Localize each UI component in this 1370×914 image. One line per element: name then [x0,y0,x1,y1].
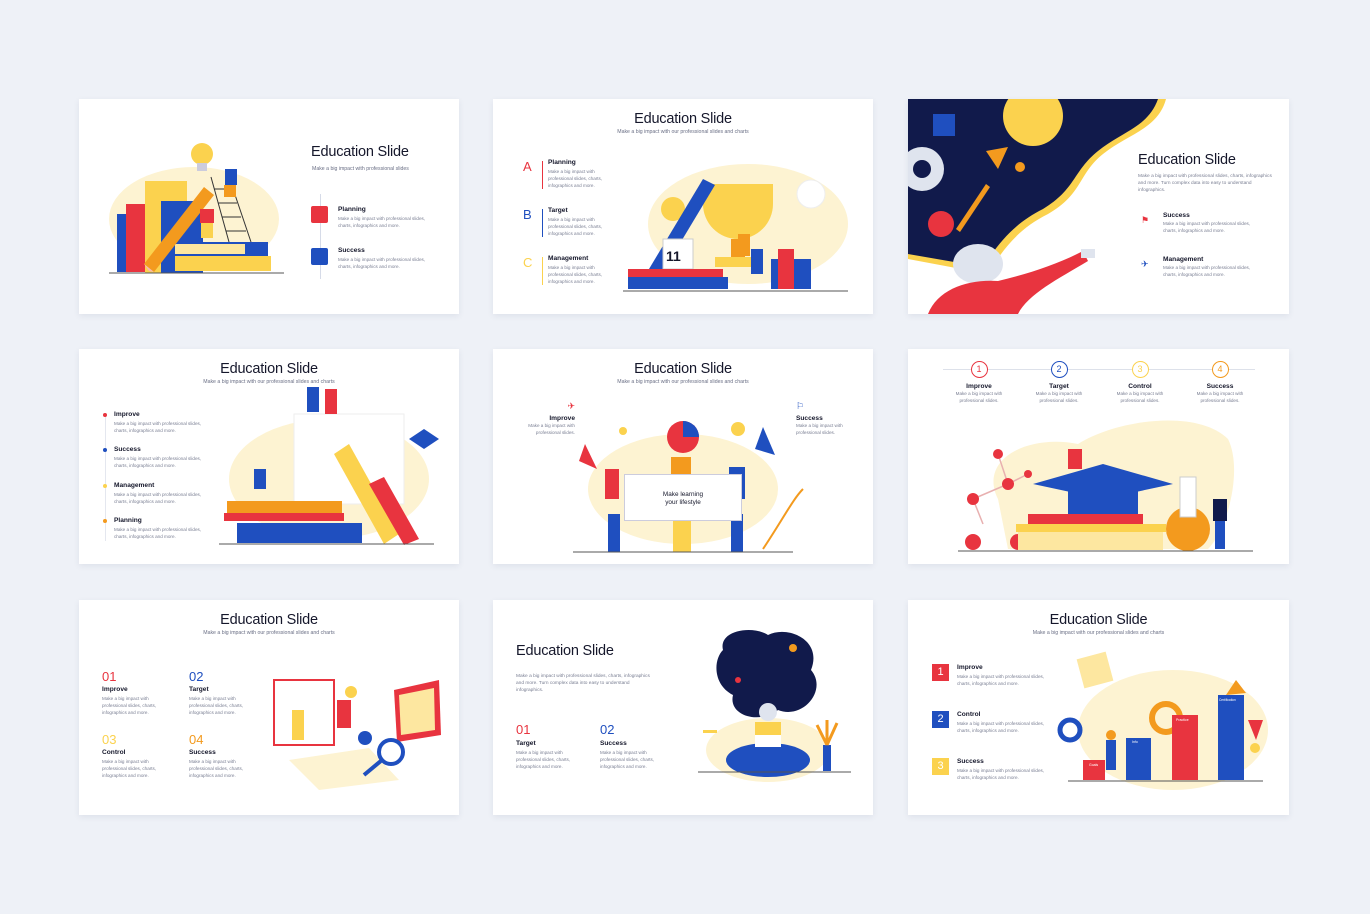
item 03 [102,732,156,778]
title: Education Slide [634,361,732,377]
item: success: Make a big impact with professional slides, charts, infographics and more. [1163,221,1250,233]
step 1: 1 [976,364,982,374]
item 01: Target [516,740,536,747]
item B: Make a big impact with professional slides, charts, infographics and more. [548,217,602,236]
item: success: Success [338,247,365,254]
slide 4 [79,349,459,564]
step 4 [1197,361,1243,403]
slide 7 [79,600,459,815]
paragraph: Make a big impact with professional slides, charts, infographics and more. Turn complex data into easy to understand infographics. [1138,174,1272,193]
item 03: 03 [102,732,116,747]
slide 8 [493,600,873,815]
item: management: Make a big impact with professional slides, charts, infographics and more. [114,492,201,504]
step 2: Make a big impact with professional slides. [1036,391,1082,403]
title: Education Slide [220,361,318,377]
item 1 [932,664,1044,686]
item 02 [189,669,243,715]
item: success: Success [796,415,823,422]
item: success [103,446,201,468]
item 01 [102,669,156,715]
item: planning: Planning [338,206,366,213]
item 01 [516,722,570,769]
item: planning: Make a big impact with professional slides, charts, infographics and more. [114,527,201,539]
item A: A [523,159,532,174]
item B: Target [548,207,568,214]
item: management [1141,256,1250,277]
sign [624,474,742,521]
item 3 [932,758,1044,780]
item C: C [523,255,532,270]
sign: Make learning [663,491,703,498]
item B: B [523,207,532,222]
illustration: bar chart with gears: Certification [1219,698,1236,702]
item 2: 2 [937,713,944,725]
item A: Planning [548,159,576,166]
item: management: Make a big impact with professional slides, charts, infographics and more. [1163,265,1250,277]
item: improve: Make a big impact with professional slides. [528,423,575,435]
item 3: Success [957,758,984,765]
item 02: Make a big impact with professional slides, charts, infographics and more. [189,696,243,715]
item 04: Make a big impact with professional slides, charts, infographics and more. [189,759,243,778]
item: improve: Make a big impact with professional slides, charts, infographics and more. [114,421,201,433]
subtitle: Make a big impact with our professional slides and charts [203,630,335,636]
item 02: Success [600,740,627,747]
item C: Make a big impact with professional slides, charts, infographics and more. [548,265,602,284]
item 3: 3 [937,760,944,772]
illustration: meditating reader with space cloud [698,630,851,782]
item 01: Improve [102,686,128,693]
item 1: Improve [957,664,983,671]
step 1: Make a big impact with professional slides. [956,391,1002,403]
item 01: 01 [516,722,530,737]
step 2: Target [1049,383,1069,390]
item: improve [103,411,201,433]
item: planning: Planning [114,517,142,524]
item: success [796,401,843,435]
item 01: Make a big impact with professional slides, charts, infographics and more. [102,696,156,715]
item: planning [311,206,425,228]
step 3: Control [1128,383,1152,390]
item 02: Target [189,686,209,693]
item 1: Make a big impact with professional slides, charts, infographics and more. [957,674,1044,686]
illustration: bar chart with gears [1058,652,1268,790]
item: management [103,482,201,504]
illustration: bar chart with gears: Goals [1089,763,1098,767]
item 03: Control [102,749,125,756]
item: success: Success [114,446,141,453]
illustration: trophy, ruler, books: 11 [666,248,681,264]
item C [523,255,602,285]
item: improve: ✈ [567,401,575,411]
subtitle: Make a big impact with our professional slides and charts [617,379,749,385]
title: Education Slide [311,144,409,160]
illustration: graduation cap, molecules, flask [958,420,1253,552]
subtitle: Make a big impact with our professional slides and charts [203,379,335,385]
slide 6 [908,349,1289,564]
item: success: Make a big impact with professional slides. [796,423,843,435]
item: success: ⚐ [796,401,804,411]
illustration: bar chart with gears: Info [1132,740,1138,744]
step 3: Make a big impact with professional slides. [1117,391,1163,403]
illustration: people holding sign [573,421,804,552]
item 2 [932,711,1044,733]
paragraph: Make a big impact with professional slides, charts, infographics and more. Turn complex data into easy to understand infographics. [516,674,650,693]
item: success [311,247,425,269]
item: success: Make a big impact with professional slides, charts, infographics and more. [338,257,425,269]
item 04: 04 [189,732,203,747]
sign: your lifestyle [665,499,701,506]
item 04 [189,732,243,778]
item 2: Make a big impact with professional slides, charts, infographics and more. [957,721,1044,733]
item C: Management [548,255,588,262]
step 3: 3 [1137,364,1142,374]
item: success: Success [1163,212,1190,219]
step 4: 4 [1217,364,1222,374]
illustration: trophy, ruler, books [623,164,848,292]
item 2: Control [957,711,980,718]
slide 9 [908,600,1289,815]
illustration: dreaming girl with space hair [908,99,1166,314]
slide 3 [908,99,1289,314]
step 2: 2 [1056,364,1062,374]
item A: Make a big impact with professional slides, charts, infographics and more. [548,169,602,188]
subtitle: Make a big impact with our professional slides and charts [1033,630,1164,636]
item: planning: Make a big impact with professional slides, charts, infographics and more. [338,216,425,228]
item: improve: Improve [114,411,140,418]
step 2 [1036,361,1082,403]
step 1: Improve [966,383,992,390]
step 4: Success [1207,383,1233,390]
item 02: 02 [189,669,203,684]
item 01: Make a big impact with professional slides, charts, infographics and more. [516,750,570,769]
subtitle: Make a big impact with professional slides [312,166,409,172]
item 1: 1 [937,666,944,678]
illustration: bar chart with gears: Practice [1176,718,1189,722]
item 01: 01 [102,669,116,684]
item: success: ⚑ [1141,215,1149,225]
title: Education Slide [220,612,318,628]
slide 2 [493,99,873,314]
item: management: Management [1163,256,1203,263]
item: improve [528,401,575,435]
item: management: Management [114,482,154,489]
subtitle: Make a big impact with our professional slides and charts [617,129,749,135]
title: Education Slide [1138,152,1236,168]
title: Education Slide [1050,612,1147,628]
item: success: Make a big impact with professional slides, charts, infographics and more. [114,456,201,468]
slide 1 [79,99,459,314]
title: Education Slide [516,643,614,659]
item: management: ✈ [1141,259,1149,269]
step 3 [1117,361,1163,403]
item: improve: Improve [549,415,575,422]
title: Education Slide [634,111,732,127]
item 3: Make a big impact with professional slides, charts, infographics and more. [957,768,1044,780]
item A [523,159,602,189]
item: planning [103,517,201,539]
item: success [1141,212,1250,233]
illustration: books stack and pencil [219,387,439,545]
slide 5 [493,349,873,564]
illustration: books, pencil, ladder [109,143,284,274]
item 02: 02 [600,722,614,737]
illustration: board, magnifier [273,679,441,790]
step 1 [956,361,1002,403]
step 4: Make a big impact with professional slides. [1197,391,1243,403]
item B [523,207,602,237]
item 02: Make a big impact with professional slides, charts, infographics and more. [600,750,654,769]
item 04: Success [189,749,216,756]
item 02 [600,722,654,769]
item 03: Make a big impact with professional slides, charts, infographics and more. [102,759,156,778]
timeline [943,369,1255,370]
